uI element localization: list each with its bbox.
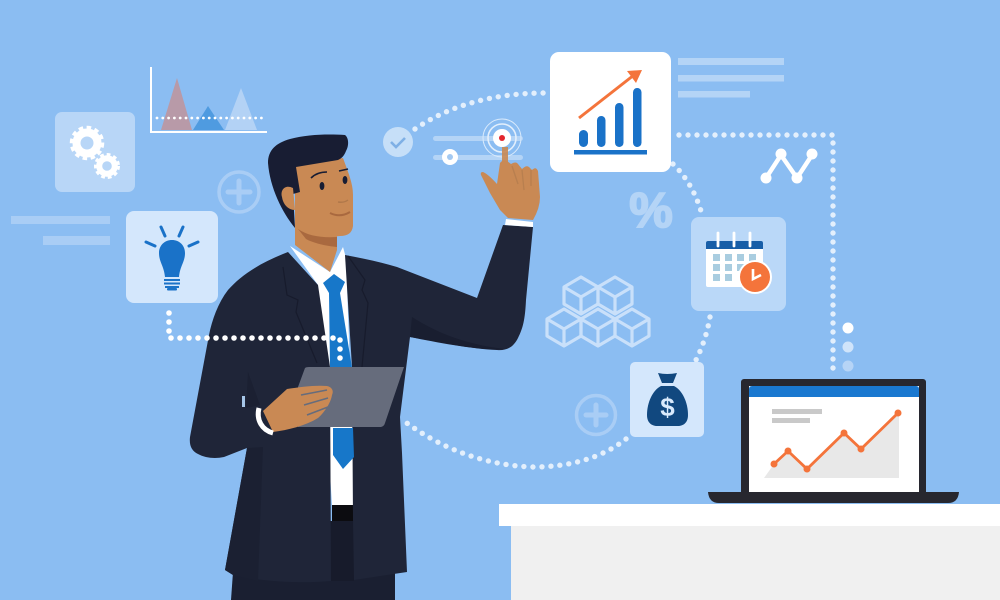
ear bbox=[282, 187, 295, 210]
shirt bbox=[290, 246, 355, 505]
touch target bbox=[483, 119, 521, 162]
icon tile: money bag bbox=[630, 362, 704, 437]
control sliders bbox=[433, 136, 523, 165]
icon: line graph nodes bbox=[760, 148, 818, 184]
icon tile: calendar with clock bbox=[691, 217, 786, 311]
left cuff bbox=[258, 408, 273, 433]
icon: mini triangle chart bbox=[151, 67, 267, 132]
panel: checkmark badge bbox=[383, 127, 413, 157]
progress dots bbox=[842, 322, 854, 372]
trousers bbox=[231, 570, 395, 600]
tie bbox=[323, 274, 354, 469]
icon tile: gears bbox=[55, 112, 135, 192]
text placeholder lines: top right bbox=[678, 58, 784, 98]
holding hand bbox=[263, 386, 333, 432]
neck bbox=[295, 225, 337, 272]
text placeholder lines: left bbox=[11, 216, 110, 245]
dotted connector: bulb through suit to tie bbox=[169, 313, 340, 363]
icon: plus circle bottom bbox=[576, 396, 616, 434]
raised cuff bbox=[505, 219, 533, 227]
icon tile: growth chart bbox=[550, 52, 671, 172]
icon tile: light bulb bbox=[126, 211, 218, 303]
dotted connector: calendar to money bag bbox=[696, 317, 710, 360]
panel: desk bbox=[499, 504, 1000, 600]
icon tile: money bag: $ bbox=[660, 392, 675, 422]
suit jacket bbox=[190, 252, 331, 582]
dotted connector: money bag to tablet bbox=[400, 418, 626, 467]
jacket shading bbox=[225, 447, 263, 581]
dotted connector: chart tile to desk laptop bbox=[679, 135, 833, 374]
percent symbol: % bbox=[629, 184, 673, 238]
tablet bbox=[298, 367, 404, 427]
dotted connector: check to chart tile bbox=[415, 93, 545, 129]
trouser front bbox=[330, 521, 354, 581]
face details bbox=[311, 169, 350, 215]
icon: isometric cubes bbox=[547, 277, 649, 346]
belt bbox=[332, 505, 355, 521]
dotted connector: chart tile to calendar bbox=[673, 164, 701, 211]
laptop bbox=[708, 379, 959, 503]
laptop screen area chart bbox=[764, 410, 902, 478]
raised hand bbox=[481, 160, 540, 220]
icon: plus circle left bbox=[219, 172, 259, 212]
hair bbox=[268, 134, 348, 228]
head bbox=[295, 158, 353, 237]
businessman figure bbox=[190, 134, 540, 600]
